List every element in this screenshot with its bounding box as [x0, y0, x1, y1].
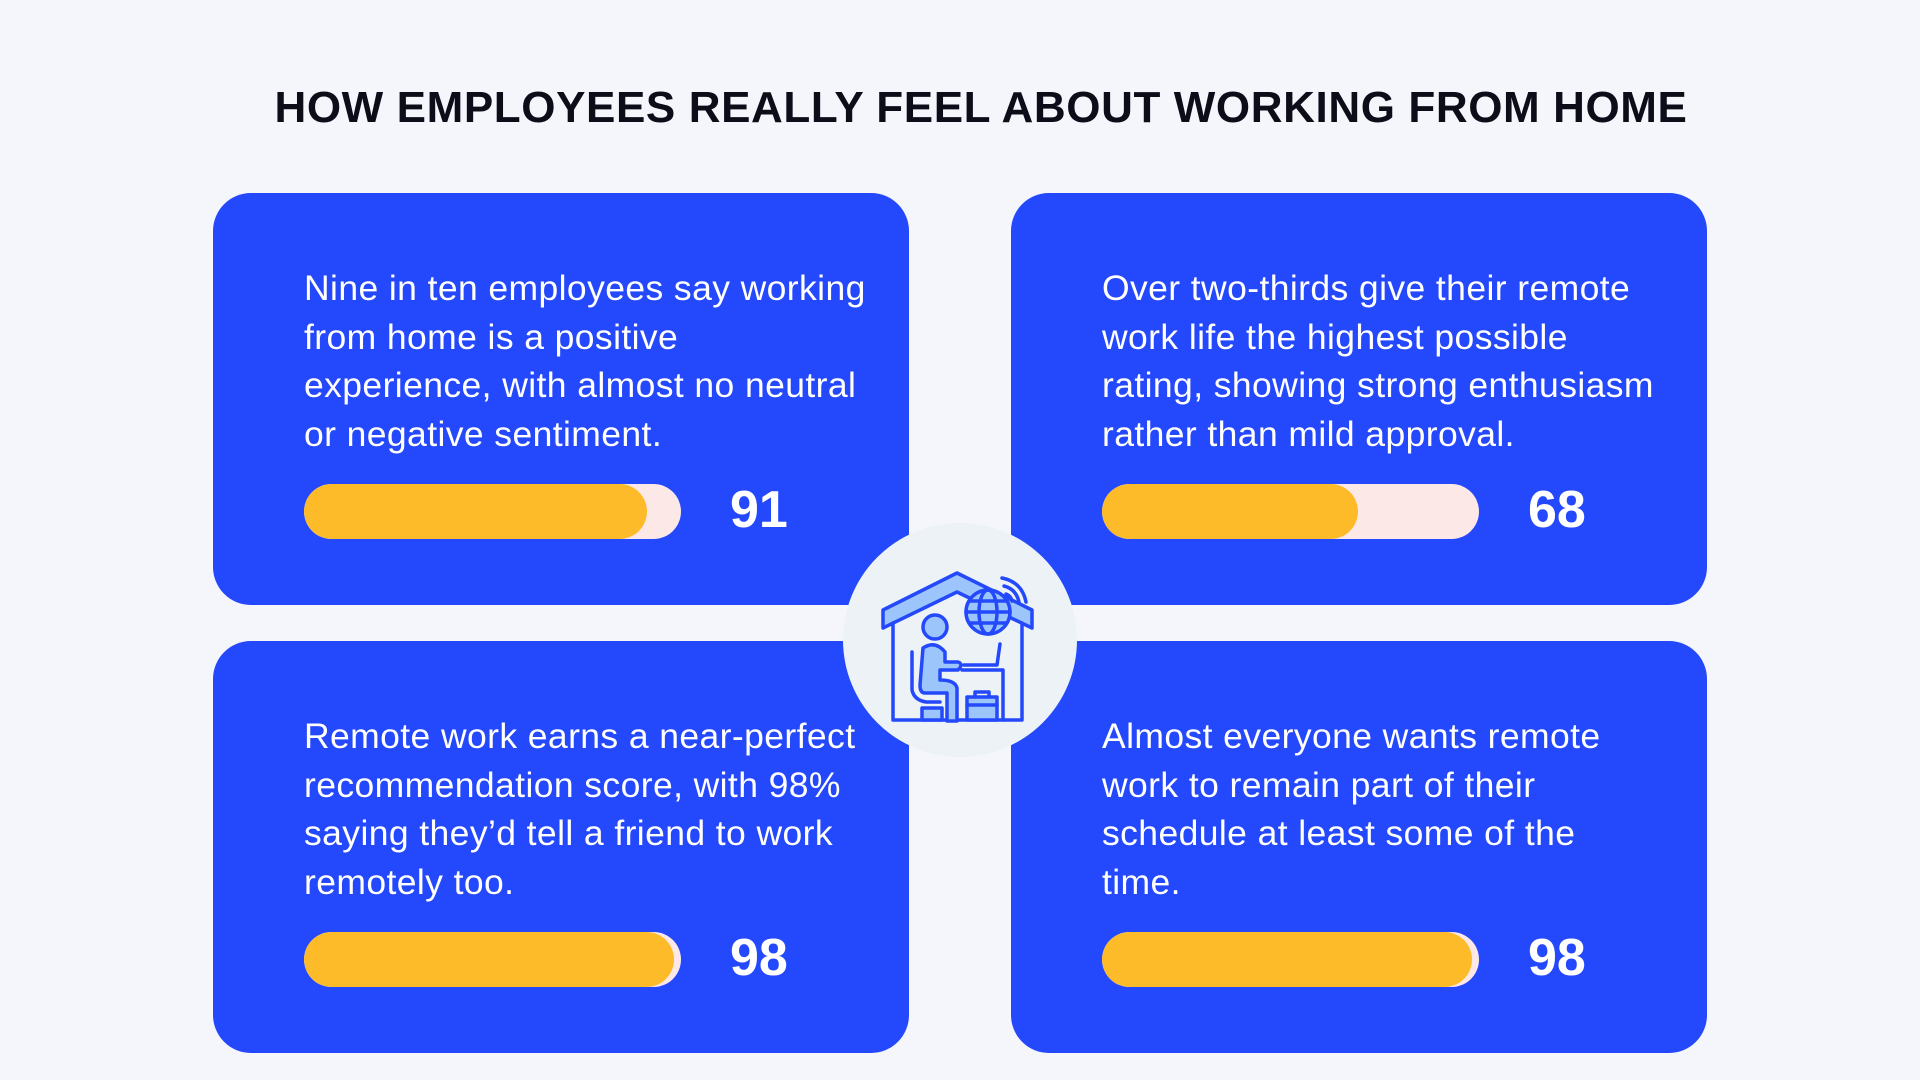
text block: time.	[1102, 862, 1181, 902]
text block: remotely too.	[304, 862, 514, 902]
text block: Nine in ten employees say working	[304, 268, 866, 308]
number 68: 68	[1528, 481, 1586, 539]
panel: remain part of schedule	[1011, 641, 1707, 1053]
panel: recommendation	[213, 641, 909, 1053]
icon: remote worker in house	[843, 523, 1077, 757]
panel: positive experience	[213, 193, 909, 605]
title: HOW EMPLOYEES REALLY FEEL ABOUT WORKING FROM HOME	[274, 83, 1688, 132]
text block: rather than mild approval.	[1102, 414, 1515, 454]
number 98: 98	[1528, 929, 1586, 987]
number 98: 98	[730, 929, 788, 987]
number 91: 91	[730, 481, 788, 539]
text block: Remote work earns a near-perfect	[304, 716, 855, 756]
text block	[1102, 268, 1654, 454]
text block: schedule at least some of the	[1102, 813, 1575, 853]
text block: or negative sentiment.	[304, 414, 662, 454]
text block	[1102, 716, 1601, 902]
text block: Over two-thirds give their remote	[1102, 268, 1630, 308]
progress bar 98	[304, 932, 681, 987]
text block	[304, 268, 866, 454]
text block: work to remain part of their	[1102, 764, 1535, 804]
progress bar 91	[304, 484, 681, 539]
progress bar 68	[1102, 484, 1479, 539]
text block: experience, with almost no neutral	[304, 365, 856, 405]
text block	[304, 716, 855, 902]
text block: work life the highest possible	[1102, 316, 1568, 356]
panel: highest rating	[1011, 193, 1707, 605]
text block: Almost everyone wants remote	[1102, 716, 1601, 756]
text block: from home is a positive	[304, 316, 678, 356]
text block: recommendation score, with 98%	[304, 764, 841, 804]
text block: saying they’d tell a friend to work	[304, 813, 833, 853]
progress bar 98	[1102, 932, 1479, 987]
text block: rating, showing strong enthusiasm	[1102, 365, 1654, 405]
